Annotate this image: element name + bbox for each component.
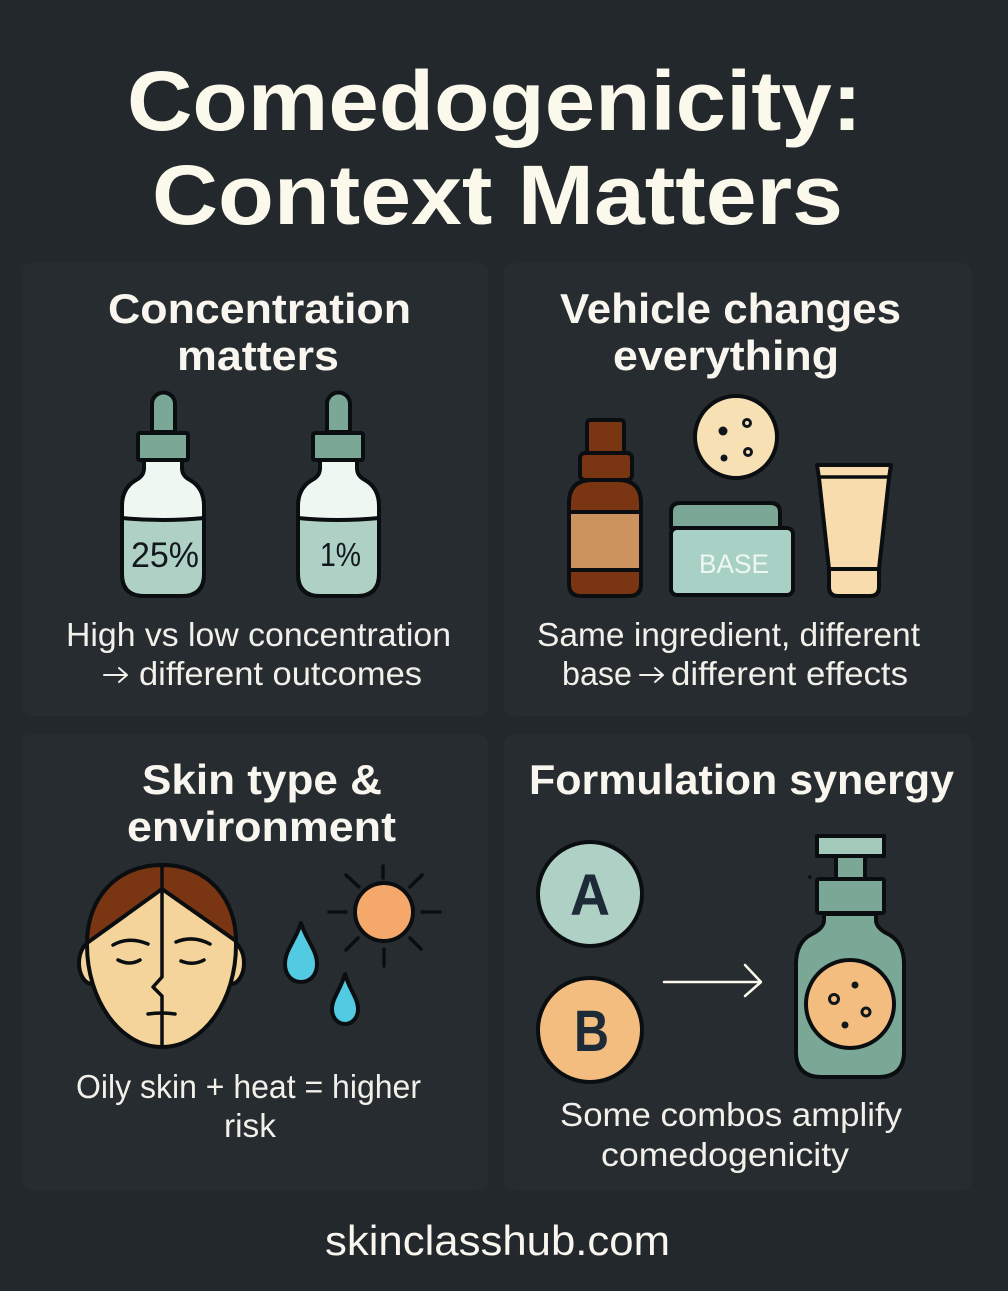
icon: skin circle with pores xyxy=(695,396,777,478)
text: synergy caption: comedogenicity xyxy=(601,1136,850,1173)
icon: sun xyxy=(329,866,440,966)
icon: split face xyxy=(79,865,244,1047)
heading: vehicle changes everything xyxy=(560,285,901,379)
panel: skin type and environment xyxy=(22,734,488,1190)
arrow xyxy=(664,965,761,996)
text: concentration caption: different outcomes xyxy=(139,655,422,692)
icon: base cream jar xyxy=(671,503,793,595)
heading: vehicle changes everything: everything xyxy=(613,332,839,379)
heading: formulation synergy: Formulation synergy xyxy=(529,756,955,803)
text: vehicle caption: Same ingredient, different xyxy=(537,616,920,653)
text: skin type caption xyxy=(76,1068,421,1144)
icon: cream tube xyxy=(817,465,891,596)
heading: vehicle changes everything: Vehicle changes xyxy=(560,285,901,332)
title: Comedogenicity: xyxy=(127,54,862,148)
heading: concentration matters: matters xyxy=(177,332,339,379)
heading: skin type and environment xyxy=(127,756,396,850)
text: concentration caption: High vs low concentration xyxy=(66,616,451,653)
panel: concentration matters xyxy=(22,263,488,716)
title: Context Matters xyxy=(152,148,843,242)
text: concentration caption xyxy=(66,616,451,692)
icon: pump bottle with skin xyxy=(796,836,904,1077)
icon: ingredient A: A xyxy=(570,863,610,928)
heading: skin type and environment: Skin type & xyxy=(142,756,382,803)
text: skin type caption: risk xyxy=(224,1107,276,1144)
panel: formulation synergy xyxy=(504,734,972,1190)
icon: 25% dropper bottle xyxy=(122,392,204,596)
icon: 25% dropper bottle: 25% xyxy=(131,536,199,575)
text: vehicle caption xyxy=(537,616,920,692)
title xyxy=(127,54,862,242)
heading: concentration matters: Concentration xyxy=(108,285,411,332)
text: vehicle caption: base xyxy=(562,655,632,692)
text: vehicle caption: different effects xyxy=(671,655,908,692)
text: synergy caption xyxy=(560,1096,903,1173)
icon: 1% dropper bottle xyxy=(298,392,379,596)
text: synergy caption: Some combos amplify xyxy=(560,1096,903,1133)
icon: ingredient A xyxy=(538,842,642,946)
icon: base cream jar: BASE xyxy=(699,549,769,579)
panel: vehicle changes everything xyxy=(504,263,972,716)
icon: ingredient B xyxy=(538,978,642,1082)
text: skin type caption: Oily skin + heat = higher xyxy=(76,1068,421,1105)
icon: brown serum bottle xyxy=(569,420,641,596)
footer: website: skinclasshub.com xyxy=(325,1217,670,1264)
heading: skin type and environment: environment xyxy=(127,803,396,850)
icon: ingredient B: B xyxy=(574,999,609,1064)
icon: 1% dropper bottle: 1% xyxy=(320,536,361,573)
heading: concentration matters xyxy=(108,285,411,379)
icon: water drops xyxy=(285,923,358,1024)
